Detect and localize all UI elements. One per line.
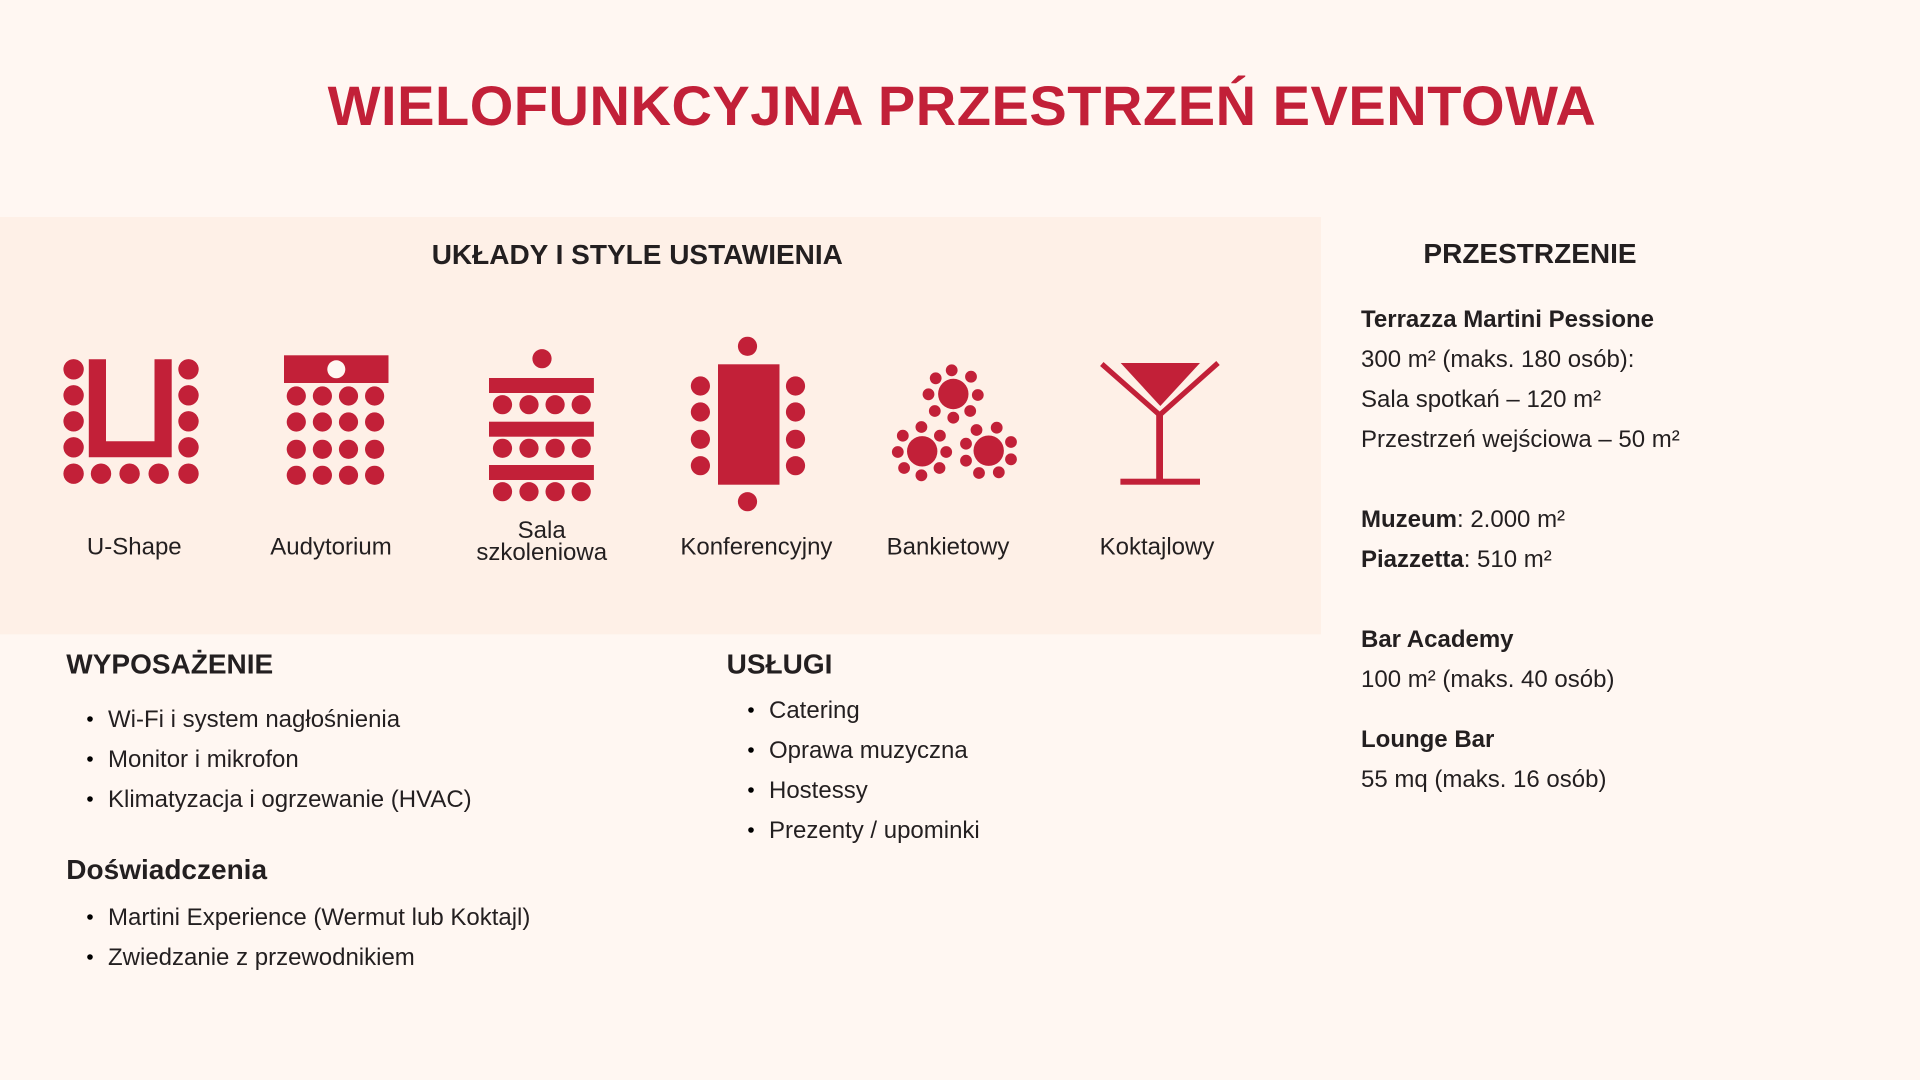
text: Bar Academy: Bar Academy [1361, 626, 1514, 653]
list: services: Catering [769, 697, 860, 724]
panel: equipment [66, 648, 472, 813]
text: Terrazza Martini Pessione: Przestrzeń wejściowa – 50 m² [1361, 426, 1680, 453]
icon: banquet tables [892, 364, 1017, 481]
label: Sala szkoleniowa: Sala [518, 517, 566, 544]
label: Konferencyjny: Konferencyjny [680, 534, 832, 560]
list: experiences: Martini Experience (Wermut lub Koktajl) [108, 904, 530, 931]
text: Muzeum and Piazzetta [1361, 506, 1565, 573]
list: services: Hostessy [769, 777, 868, 804]
list: equipment [87, 706, 472, 813]
panel: spaces [1361, 238, 1680, 793]
list: services: Oprawa muzyczna [769, 737, 968, 764]
icon: classroom [489, 349, 594, 501]
list: equipment: Wi-Fi i system nagłośnienia [108, 706, 401, 733]
list: experiences: Zwiedzanie z przewodnikiem [108, 944, 415, 971]
label: Bankietowy: Bankietowy [887, 534, 1009, 560]
heading: equipment: WYPOSAŻENIE [66, 648, 273, 679]
label: Koktajlowy: Koktajlowy [1100, 534, 1214, 560]
text: Lounge Bar [1361, 726, 1606, 793]
layout: Konferencyjny [680, 337, 832, 560]
text: Terrazza Martini Pessione: Terrazza Martini Pessione [1361, 306, 1654, 333]
icon: auditorium [284, 355, 388, 485]
layout: Bankietowy [887, 364, 1017, 560]
list: services: Prezenty / upominki [769, 817, 980, 844]
heading: experiences: Doświadczenia [66, 854, 267, 885]
heading: services: USŁUGI [727, 648, 832, 679]
label: Audytorium: Audytorium [270, 534, 392, 560]
panel: layouts and seating styles [0, 217, 1321, 634]
text: Muzeum and Piazzetta: Piazzetta: 510 m² [1361, 546, 1552, 573]
heading: spaces: PRZESTRZENIE [1423, 238, 1637, 269]
layout: Audytorium [270, 355, 392, 560]
label: Sala szkoleniowa: szkoleniowa [476, 539, 608, 566]
text: Lounge Bar: 55 mq (maks. 16 osób) [1361, 766, 1606, 793]
layout: U-Shape [63, 359, 199, 560]
panel: experiences [66, 854, 530, 971]
list: equipment: Monitor i mikrofon [108, 746, 299, 773]
title: WIELOFUNKCYJNA PRZESTRZEŃ EVENTOWA [328, 74, 1596, 137]
text: Muzeum and Piazzetta: Muzeum: 2.000 m² [1361, 506, 1565, 533]
layout: Koktajlowy [1100, 363, 1218, 560]
label: U-Shape: U-Shape [87, 534, 182, 560]
icon: cocktail glass [1102, 363, 1218, 485]
label: Sala szkoleniowa [476, 517, 608, 566]
text: Terrazza Martini Pessione: 300 m² (maks. 180 osób): [1361, 346, 1634, 373]
list: equipment: Klimatyzacja i ogrzewanie (HVAC) [108, 786, 472, 813]
text: Bar Academy [1361, 626, 1614, 693]
panel: services [727, 648, 980, 844]
list: experiences [87, 904, 530, 971]
text: Lounge Bar: Lounge Bar [1361, 726, 1494, 753]
icon: U-shape table [63, 359, 199, 484]
heading: layouts: UKŁADY I STYLE USTAWIENIA [432, 239, 843, 270]
icon: conference table [691, 337, 805, 511]
text: Terrazza Martini Pessione [1361, 306, 1680, 453]
text: Bar Academy: 100 m² (maks. 40 osób) [1361, 666, 1614, 693]
list: services [748, 697, 980, 844]
text: Terrazza Martini Pessione: Sala spotkań – 120 m² [1361, 386, 1601, 413]
layout: Sala szkoleniowa [476, 349, 608, 566]
